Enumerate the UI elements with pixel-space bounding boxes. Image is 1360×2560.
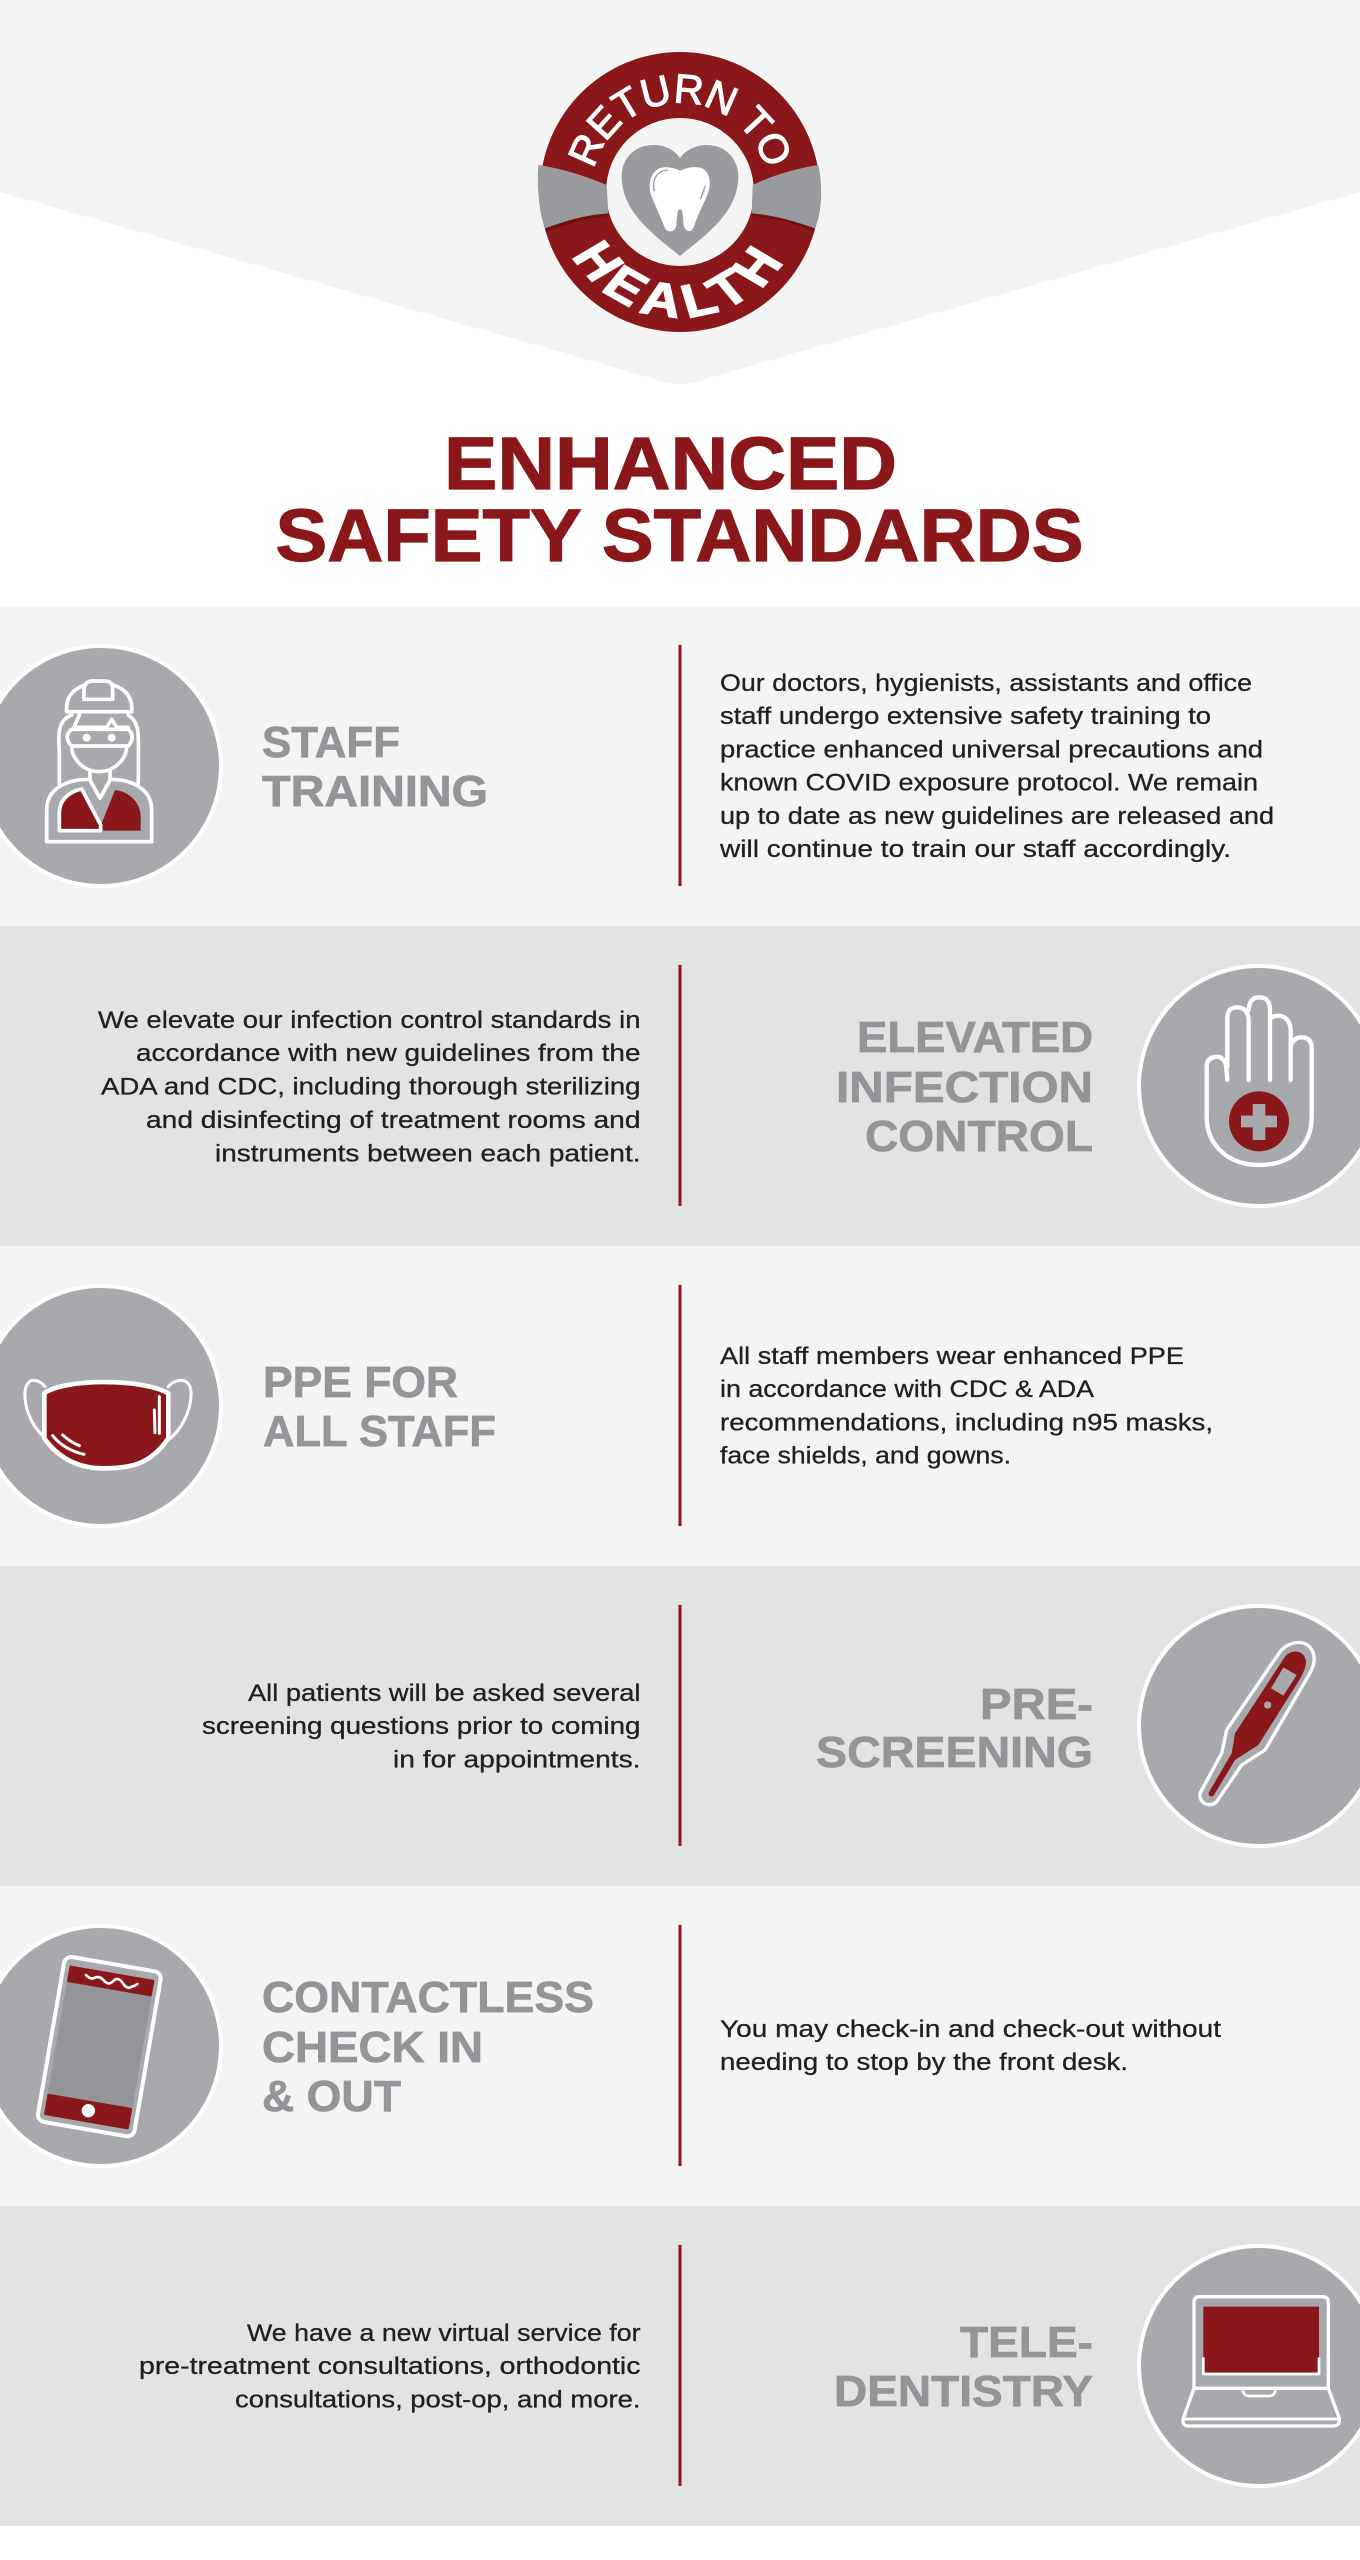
icon: smartphone — [0, 1926, 221, 2166]
body text — [720, 1343, 1213, 1470]
body text: All patients will be asked several — [248, 1680, 640, 1707]
heading: PPE FOR — [263, 1358, 458, 1407]
body text: You may check-in and check-out without — [720, 2016, 1221, 2043]
icon: heart with tooth — [622, 145, 738, 256]
heading: CONTROL — [865, 1112, 1093, 1161]
heading: TRAINING — [262, 767, 488, 816]
heading — [262, 1973, 594, 2121]
band background — [0, 1886, 1360, 2206]
body text: ADA and CDC, including thorough sterilizing — [101, 1074, 640, 1100]
band background — [0, 1246, 1360, 1566]
body text: in for appointments. — [393, 1746, 640, 1774]
heading — [834, 2318, 1093, 2416]
badge inner circle — [606, 118, 754, 266]
band background — [0, 1566, 1360, 1886]
heading: CONTACTLESS — [262, 1973, 594, 2022]
body text — [139, 2320, 640, 2414]
title — [276, 422, 1084, 577]
body text: face shields, and gowns. — [720, 1442, 1011, 1470]
icon: hand with medical cross — [1139, 966, 1360, 1206]
title: ENHANCED — [444, 422, 897, 505]
body text — [719, 670, 1274, 863]
body text — [720, 2016, 1221, 2076]
badge: return to health — [538, 52, 822, 332]
heading — [816, 1680, 1093, 1777]
heading: SCREENING — [816, 1728, 1093, 1777]
panel: elevated infection control — [0, 926, 1360, 1246]
badge text: return to: RETURN TO — [568, 74, 789, 166]
body text: in accordance with CDC & ADA — [720, 1376, 1094, 1403]
band background — [0, 926, 1360, 1246]
heading: PRE- — [980, 1680, 1093, 1729]
body text: and disinfecting of treatment rooms and — [146, 1107, 640, 1134]
heading: ELEVATED — [857, 1013, 1093, 1062]
body text: We have a new virtual service for — [247, 2320, 640, 2347]
title: SAFETY STANDARDS — [276, 494, 1084, 577]
panel: tele-dentistry — [0, 2206, 1360, 2526]
body text: screening questions prior to coming — [202, 1713, 640, 1740]
icon: laptop — [1139, 2246, 1360, 2486]
heading: & OUT — [262, 2072, 401, 2121]
badge ribbon — [538, 165, 821, 232]
panel: staff training — [0, 606, 1360, 926]
body text: pre-treatment consultations, orthodontic — [139, 2353, 640, 2380]
body text: accordance with new guidelines from the — [136, 1040, 640, 1067]
body text: will continue to train our staff accordingly. — [719, 836, 1231, 863]
body text — [202, 1680, 640, 1774]
header chevron background — [0, 0, 1360, 384]
heading: INFECTION — [836, 1063, 1093, 1112]
icon: thermometer — [1139, 1606, 1360, 1846]
band background — [0, 606, 1360, 926]
panel: ppe for all staff — [0, 1246, 1360, 1566]
body text: All staff members wear enhanced PPE — [720, 1343, 1184, 1370]
body text: practice enhanced universal precautions and — [720, 736, 1263, 764]
heading: CHECK IN — [262, 2023, 483, 2072]
heading: ALL STAFF — [263, 1407, 496, 1456]
body text: needing to stop by the front desk. — [720, 2049, 1128, 2076]
badge red disc — [540, 52, 820, 332]
body text: known COVID exposure protocol. We remain — [720, 770, 1258, 796]
body text: up to date as new guidelines are released and — [720, 803, 1274, 830]
heading — [262, 718, 488, 816]
body text: recommendations, including n95 masks, — [720, 1410, 1213, 1436]
body text: We elevate our infection control standards in — [98, 1007, 640, 1034]
panel: contactless check in and out — [0, 1886, 1360, 2206]
icon: face mask — [0, 1286, 221, 1526]
badge text: health: HEALTH — [572, 240, 784, 319]
heading: DENTISTRY — [834, 2367, 1093, 2416]
heading: STAFF — [262, 718, 400, 767]
band background — [0, 2206, 1360, 2526]
panel: pre-screening — [0, 1566, 1360, 1886]
icon: staff member — [0, 646, 221, 886]
body text: Our doctors, hygienists, assistants and office — [720, 670, 1252, 697]
heading: TELE- — [960, 2318, 1093, 2367]
body text: consultations, post-op, and more. — [235, 2386, 640, 2414]
heading — [263, 1358, 496, 1456]
heading — [836, 1013, 1093, 1161]
body text — [98, 1007, 640, 1168]
body text: instruments between each patient. — [215, 1140, 640, 1168]
body text: staff undergo extensive safety training to — [720, 703, 1211, 730]
